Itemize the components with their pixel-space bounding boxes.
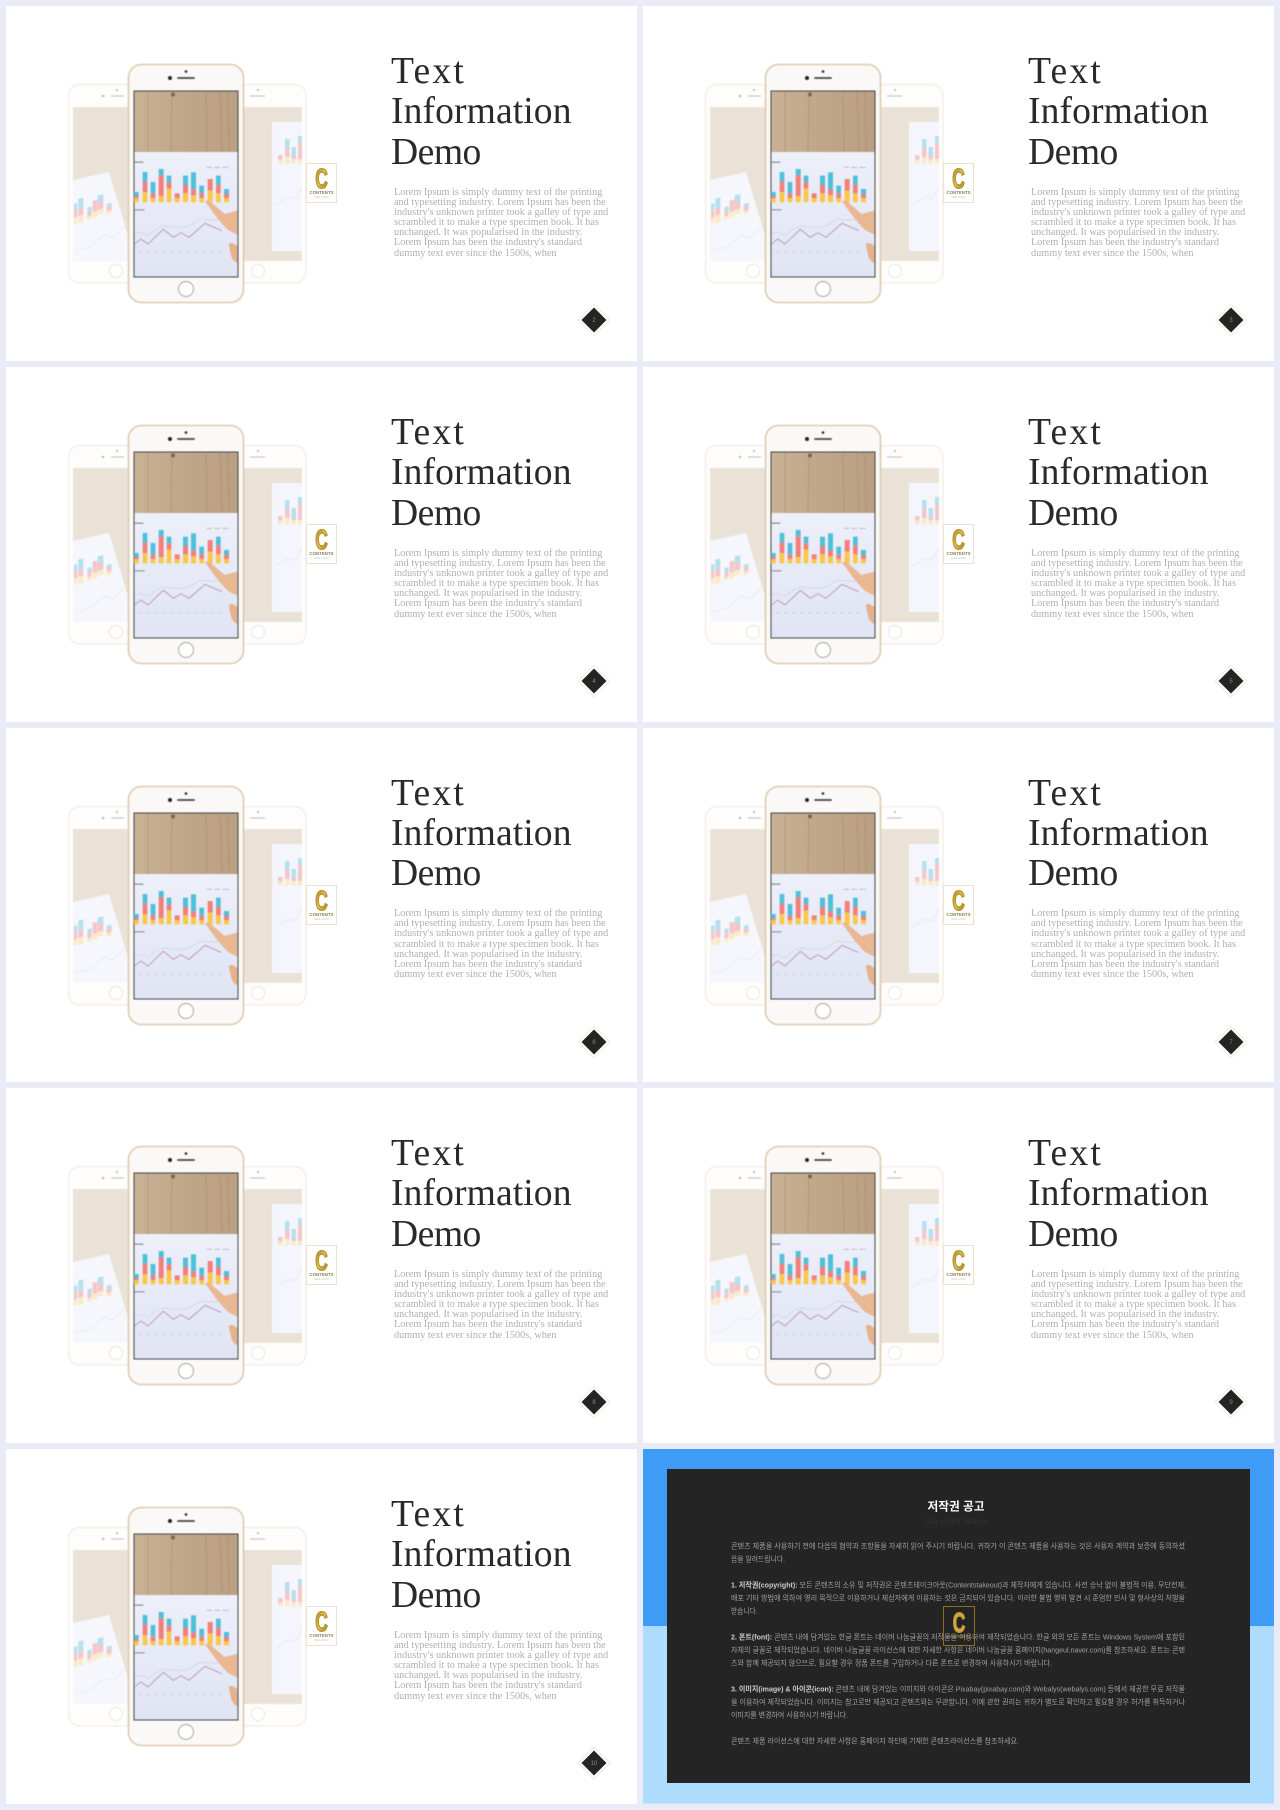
panel: slide 9 — [643, 1088, 1274, 1442]
body text — [1031, 548, 1246, 620]
gold logo watermark: C — [953, 1607, 965, 1638]
body text: Lorem Ipsum is simply dummy text of the printing — [1031, 908, 1239, 919]
title: Information — [391, 1534, 572, 1575]
title: Demo — [1028, 853, 1118, 894]
logo badge: C — [315, 1606, 328, 1637]
title: Demo — [391, 1575, 481, 1616]
logo badge: CONTENTS — [946, 190, 971, 195]
page number badge — [572, 1741, 616, 1785]
panel: slide 4 — [6, 367, 637, 722]
page number badge: 3 — [1229, 318, 1233, 324]
body text: unchanged. It was popularised in the industry. — [394, 1309, 582, 1320]
body text: industry's unknown printer took a galley of type and — [394, 1650, 608, 1661]
body text: Lorem Ipsum has been the industry's standard — [394, 1680, 582, 1691]
title: Information — [391, 452, 572, 493]
page number badge: 7 — [1229, 1040, 1233, 1046]
title: Text — [1028, 772, 1103, 814]
page number badge: 8 — [592, 1400, 596, 1406]
logo badge — [943, 884, 974, 925]
title: Information — [391, 1173, 572, 1214]
logo badge: MAIL LOGO — [314, 1277, 329, 1281]
title: Information — [391, 91, 572, 132]
page number badge — [1214, 664, 1248, 698]
body text: Lorem Ipsum has been the industry's standard — [394, 959, 582, 970]
title: Text — [391, 1133, 466, 1174]
logo badge: C — [952, 1245, 965, 1276]
body text: and typesetting industry. Lorem Ipsum has been the — [1031, 197, 1243, 208]
logo badge: MAIL LOGO — [951, 916, 966, 920]
body text: unchanged. It was popularised in the industry. — [394, 227, 582, 238]
title — [1028, 772, 1209, 894]
title: Text — [391, 1494, 466, 1535]
page number badge: 2 — [592, 318, 596, 324]
page number badge — [1214, 1026, 1248, 1058]
page number badge: 9 — [1229, 1400, 1233, 1406]
page number badge: 6 — [592, 1040, 596, 1046]
title — [1028, 1133, 1209, 1255]
body text: scrambled it to make a type specimen book. It has — [394, 217, 599, 228]
title: Information — [1028, 1173, 1209, 1214]
page number badge — [578, 664, 610, 698]
title — [391, 51, 572, 173]
body text: Lorem Ipsum is simply dummy text of the printing — [1031, 548, 1239, 558]
body text: scrambled it to make a type specimen book. It has — [394, 1299, 599, 1310]
phone mockups — [704, 785, 944, 1026]
logo badge: CONTENTS — [946, 1272, 971, 1277]
logo badge — [943, 163, 974, 203]
body text: Lorem Ipsum has been the industry's standard — [394, 237, 582, 248]
body text: dummy text ever since the 1500s, when — [1031, 1330, 1194, 1341]
logo badge — [943, 524, 974, 564]
logo badge: CONTENTS — [309, 1633, 334, 1638]
body text: Lorem Ipsum is simply dummy text of the printing — [394, 186, 602, 198]
logo badge: MAIL LOGO — [314, 916, 329, 920]
body text: dummy text ever since the 1500s, when — [394, 1691, 557, 1702]
page number badge: 10 — [591, 1761, 598, 1767]
title: Demo — [391, 1214, 481, 1255]
logo badge — [306, 884, 337, 925]
body text: Lorem Ipsum has been the industry's standard — [1031, 237, 1219, 248]
body text: dummy text ever since the 1500s, when — [1031, 609, 1194, 620]
panel: slide 8 — [6, 1088, 637, 1442]
logo badge: C — [315, 1245, 328, 1276]
title: Text — [1028, 51, 1103, 92]
logo badge: CONTENTS — [309, 551, 334, 556]
body text: dummy text ever since the 1500s, when — [394, 969, 557, 980]
panel: slide 6 — [6, 728, 637, 1082]
notice body text: 을 이용하여 제작되었습니다. 이미지는 참고로만 제공되고 콘텐츠와는 무관합니다. 이에 관한 권리는 귀하가 별도로 확인하고 필요할 경우 허가를 취득하거나 — [731, 1696, 1185, 1706]
logo badge: MAIL LOGO — [314, 1638, 329, 1642]
body text: Lorem Ipsum has been the industry's standard — [1031, 1319, 1219, 1330]
title: Text — [391, 412, 466, 453]
page number badge — [578, 1386, 610, 1418]
logo badge: MAIL LOGO — [951, 195, 966, 199]
body text: unchanged. It was popularised in the industry. — [394, 588, 582, 599]
logo badge: CONTENTS — [946, 551, 971, 556]
body text: and typesetting industry. Lorem Ipsum has been the — [1031, 1279, 1243, 1290]
logo badge — [306, 1245, 337, 1285]
body text: Lorem Ipsum is simply dummy text of the printing — [394, 1268, 602, 1280]
body text: unchanged. It was popularised in the industry. — [1031, 227, 1219, 238]
title: Demo — [391, 493, 481, 534]
body text: dummy text ever since the 1500s, when — [1031, 248, 1194, 259]
page number badge — [1214, 1386, 1248, 1418]
body text: Lorem Ipsum has been the industry's standard — [394, 1319, 582, 1330]
phone mockups — [68, 63, 307, 304]
title: Text — [391, 772, 466, 814]
page number badge: 4 — [592, 679, 596, 685]
gold logo watermark — [944, 1606, 974, 1646]
panel: slide 7 — [643, 728, 1274, 1082]
page number badge — [578, 1026, 610, 1058]
notice body text — [731, 1540, 1186, 1746]
body text: and typesetting industry. Lorem Ipsum has been the — [394, 1279, 606, 1290]
phone mockups — [704, 1145, 944, 1386]
body text — [1031, 1268, 1246, 1341]
title — [391, 1495, 572, 1616]
logo badge: MAIL LOGO — [314, 195, 329, 199]
body text: and typesetting industry. Lorem Ipsum has been the — [394, 558, 606, 569]
logo badge: CONTENTS — [309, 912, 334, 916]
body text: Lorem Ipsum is simply dummy text of the printing — [1031, 186, 1239, 198]
body text: Lorem Ipsum has been the industry's standard — [1031, 959, 1219, 970]
body text: scrambled it to make a type specimen book. It has — [1031, 578, 1236, 589]
body text: dummy text ever since the 1500s, when — [394, 1330, 557, 1341]
title — [391, 1133, 572, 1255]
body text: and typesetting industry. Lorem Ipsum has been the — [1031, 918, 1243, 929]
body text: and typesetting industry. Lorem Ipsum has been the — [394, 1640, 606, 1651]
body text — [394, 548, 608, 620]
phone mockups — [704, 63, 944, 304]
logo badge: C — [952, 524, 965, 555]
body text: scrambled it to make a type specimen book. It has — [394, 939, 599, 950]
body text: unchanged. It was popularised in the industry. — [1031, 588, 1219, 599]
logo badge: C — [315, 884, 328, 916]
notice body text: 콘텐츠 제품을 사용하기 전에 다음의 협약과 조항들을 자세히 읽어 주시기 바랍니다. 귀하가 이 콘텐츠 제품을 사용하는 것은 사용자 계약과 보증에 동의하셨 — [731, 1540, 1185, 1550]
logo badge: C — [952, 163, 965, 194]
title: Information — [1028, 813, 1209, 854]
body text: dummy text ever since the 1500s, when — [1031, 969, 1194, 980]
gold logo watermark: CONTENTS — [947, 1634, 971, 1639]
title — [391, 412, 572, 534]
title: Demo — [1028, 493, 1118, 534]
panel: copyright notice — [643, 1449, 1274, 1804]
panel: slide 5 — [643, 367, 1274, 722]
logo badge — [306, 1606, 337, 1646]
title: Demo — [1028, 1214, 1118, 1255]
logo badge: CONTENTS — [309, 190, 334, 195]
body text — [1031, 186, 1246, 259]
title: Information — [1028, 452, 1209, 493]
body text: industry's unknown printer took a galley of type and — [394, 1289, 608, 1300]
notice body text: 츠와 함께 제공되지 않으므로, 필요할 경우 정품 폰트를 구입하거나 다른 폰트로 변경하여 사용하시기 바랍니다. — [731, 1658, 1052, 1668]
body text: Lorem Ipsum is simply dummy text of the printing — [394, 1630, 602, 1640]
phone mockups — [6, 1449, 637, 1804]
panel: slide 10 — [6, 1449, 637, 1804]
logo badge: MAIL LOGO — [951, 556, 966, 560]
notice body text: 받습니다. — [731, 1606, 758, 1616]
panel: slide 2 — [6, 6, 637, 360]
body text: scrambled it to make a type specimen book. It has — [394, 578, 599, 589]
notice body text: 배포 기타 방법에 의하여 영리 목적으로 이용하거나 제삼자에게 이용하는 것은 금지되어 있습니다. 이러한 불법 행위 발견 시 준엄한 민사 및 형사상의 처벌을 — [731, 1592, 1185, 1602]
notice body text: 2. 폰트(font): 콘텐츠 내에 담겨있는 한글 폰트는 네이버 나눔글꼴의 저작물을 이용하여 제작되었습니다. 한글 외의 모든 폰트는 Windows System에 포함된 — [731, 1632, 1185, 1642]
body text — [394, 186, 608, 259]
logo badge: CONTENTS — [309, 1272, 334, 1277]
body text: industry's unknown printer took a galley of type and — [394, 928, 608, 939]
body text — [394, 1630, 608, 1702]
notice body text: 자체의 글꼴로 제작되었습니다. 네이버 나눔글꼴 라이선스에 대한 자세한 사항은 네이버 나눔글꼴 홈페이지(hangeul.naver.com)를 참조하세요. 폰트는 콘텐 — [731, 1644, 1185, 1654]
notice body text: 음을 알려드립니다. — [731, 1554, 785, 1564]
title: Information — [391, 813, 572, 854]
logo badge: MAIL LOGO — [951, 1277, 966, 1281]
title: Information — [1028, 91, 1209, 132]
title: Demo — [391, 132, 481, 173]
notice body text: 3. 이미지(image) & 아이콘(icon): 콘텐츠 내에 담겨있는 이미지와 아이콘은 Pixabay(pixabay.com)와 Webalys(webalys.com) 등에서 제공한 무료 저작물 — [731, 1684, 1185, 1694]
body text: unchanged. It was popularised in the industry. — [1031, 949, 1219, 960]
title — [1028, 51, 1209, 173]
body text: and typesetting industry. Lorem Ipsum has been the — [1031, 558, 1243, 569]
phone mockups — [68, 1145, 307, 1386]
logo badge — [306, 524, 337, 564]
body text: unchanged. It was popularised in the industry. — [394, 949, 582, 960]
logo badge: C — [315, 163, 328, 194]
body text: industry's unknown printer took a galley of type and — [1031, 207, 1245, 218]
body text — [394, 908, 608, 980]
body text: Lorem Ipsum is simply dummy text of the printing — [1031, 1268, 1239, 1280]
title — [1028, 412, 1209, 534]
panel: slide 3 — [643, 6, 1274, 360]
body text: unchanged. It was popularised in the industry. — [394, 1670, 582, 1681]
body text: Lorem Ipsum has been the industry's standard — [394, 598, 582, 609]
notice body text: 이미지를 변경하여 사용하시기 바랍니다. — [731, 1710, 848, 1720]
title: Demo — [1028, 132, 1118, 173]
body text: scrambled it to make a type specimen book. It has — [1031, 1299, 1236, 1310]
phone mockups — [68, 785, 307, 1026]
title: Text — [1028, 1133, 1103, 1174]
body text — [1031, 908, 1246, 980]
logo badge: CONTENTS — [946, 912, 971, 916]
body text: scrambled it to make a type specimen book. It has — [394, 1660, 599, 1671]
body text: Lorem Ipsum is simply dummy text of the printing — [394, 908, 602, 919]
phone mockups — [68, 424, 307, 665]
notice title: 저작권 공고 — [927, 1500, 985, 1514]
logo badge — [306, 163, 337, 203]
body text: industry's unknown printer took a galley of type and — [1031, 568, 1245, 579]
phone mockups — [704, 424, 944, 665]
body text: scrambled it to make a type specimen book. It has — [1031, 939, 1236, 950]
body text — [394, 1268, 608, 1341]
body text: industry's unknown printer took a galley of type and — [394, 207, 608, 218]
title — [391, 772, 572, 894]
notice body text: 1. 저작권(copyright): 모든 콘텐츠의 소유 및 저작권은 콘텐츠테이크아웃(Contentstakeout)과 제작자에게 있습니다. 사전 승낙 없이 불법적 이용, 무단전재, — [731, 1580, 1186, 1590]
page number badge — [578, 304, 610, 336]
logo badge — [943, 1245, 974, 1285]
body text: industry's unknown printer took a galley of type and — [1031, 928, 1245, 939]
logo badge: C — [952, 884, 965, 916]
title: Demo — [391, 853, 481, 894]
page number badge — [1214, 304, 1248, 336]
body text: unchanged. It was popularised in the industry. — [1031, 1309, 1219, 1320]
body text: industry's unknown printer took a galley of type and — [394, 568, 608, 579]
title: Text — [391, 51, 466, 92]
logo badge: C — [315, 524, 328, 555]
page number badge: 5 — [1229, 679, 1233, 685]
body text: industry's unknown printer took a galley of type and — [1031, 1289, 1245, 1300]
body text: Lorem Ipsum has been the industry's standard — [1031, 598, 1219, 609]
body text: dummy text ever since the 1500s, when — [394, 609, 557, 620]
logo badge: MAIL LOGO — [314, 556, 329, 560]
notice subtitle: Copyright Notice — [925, 1516, 988, 1526]
body text: scrambled it to make a type specimen book. It has — [1031, 217, 1236, 228]
body text: dummy text ever since the 1500s, when — [394, 248, 557, 259]
title: Text — [1028, 412, 1103, 453]
body text: and typesetting industry. Lorem Ipsum has been the — [394, 197, 606, 208]
body text: Lorem Ipsum is simply dummy text of the printing — [394, 548, 602, 558]
notice body text: 콘텐츠 제품 라이선스에 대한 자세한 사항은 홈페이지 하단에 기재한 콘텐츠라이선스를 참조하세요. — [731, 1736, 1019, 1746]
body text: and typesetting industry. Lorem Ipsum has been the — [394, 918, 606, 929]
